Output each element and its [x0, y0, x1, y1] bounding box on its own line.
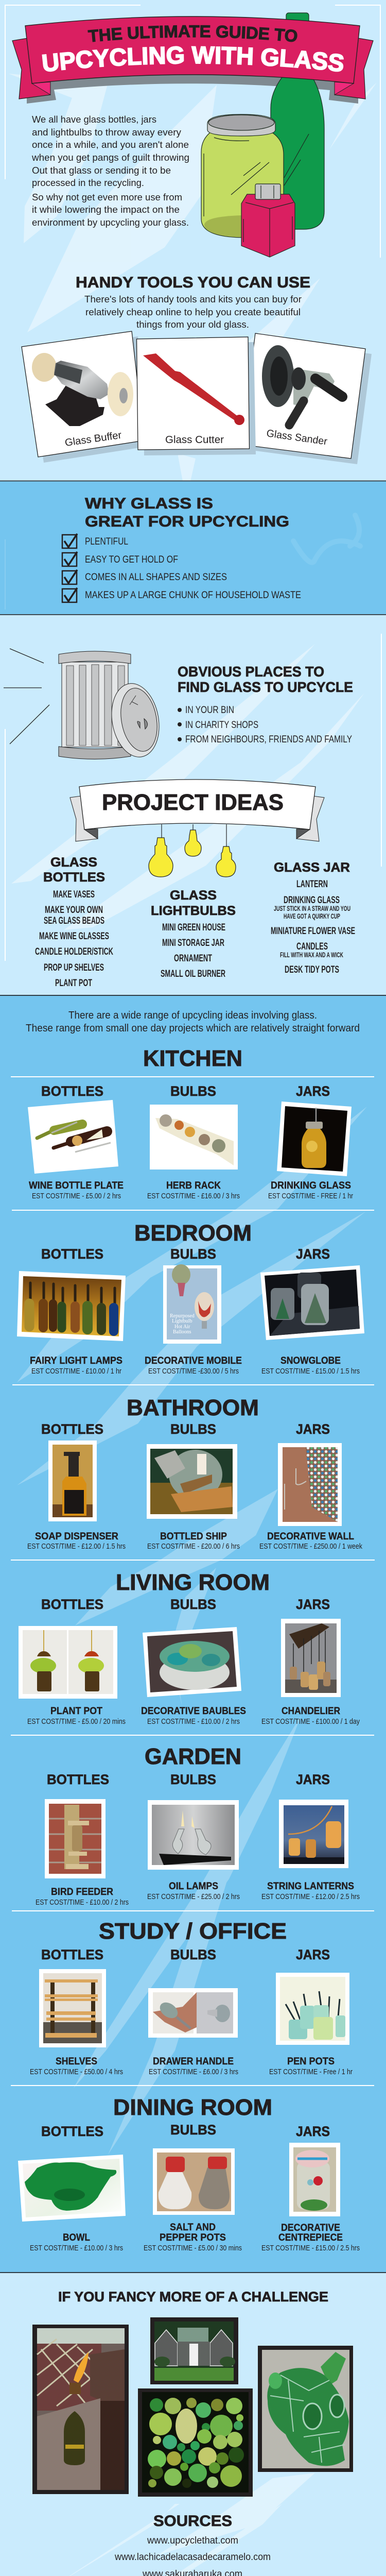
- project: decorative mobile: Hot Air: [174, 1324, 190, 1330]
- project: drawer handle: EST COST/TIME - £6.00 / 3 hrs: [149, 2067, 238, 2076]
- intro text: Out that glass or sending it to be: [32, 165, 171, 176]
- icon: checkbox 3: [62, 570, 77, 584]
- project: bottled ship: BOTTLED SHIP: [160, 1531, 227, 1542]
- intro text: [31, 114, 189, 228]
- intro text: and lightbulbs to throw away every: [32, 127, 181, 138]
- column: glass bottles: PROP UP SHELVES: [44, 962, 104, 973]
- project: decorative mobile: DECORATIVE MOBILE: [145, 1355, 242, 1366]
- column headings: BULBS: [170, 1772, 216, 1787]
- column: glass bottles: PLANT POT: [55, 978, 92, 989]
- project: drinking glass: EST COST/TIME - FREE / 1 hr: [268, 1192, 353, 1200]
- banner: project ideas: [70, 779, 324, 841]
- project: decorative mobile: EST COST/TIME -£30.00 / 5 hrs: [148, 1367, 239, 1376]
- top frame lines: [5, 5, 381, 961]
- column headings: [41, 1246, 330, 1262]
- item 3: COMES IN ALL SHAPES AND SIZES: [85, 572, 227, 583]
- panel: bedroom: [12, 1221, 374, 1385]
- icon: sander: [262, 345, 342, 425]
- heading: sources: SOURCES: [153, 2513, 232, 2530]
- heading: dining room: DINING ROOM: [113, 2095, 272, 2120]
- panel: project band background: [0, 995, 386, 2273]
- background light streaks, upper section: [9, 74, 377, 930]
- column headings: BOTTLES: [41, 2124, 103, 2139]
- icon: hanging lightbulbs: [149, 824, 236, 877]
- project: plant pot: [19, 1626, 126, 1726]
- project: string lanterns: EST COST/TIME - £12.00 / 2.5 hrs: [261, 1892, 360, 1901]
- item 2: EASY TO GET HOLD OF: [85, 554, 178, 565]
- intro text: We all have glass bottles, jars: [32, 114, 156, 125]
- project: decorative baubles: EST COST/TIME - £10.00 / 2 hrs: [147, 1717, 240, 1726]
- project: herb rack: HERB RACK: [166, 1180, 221, 1191]
- column: glass bottles: GLASS: [50, 855, 97, 870]
- source links: [114, 2535, 271, 2576]
- intro to rooms: There are a wide range of upcycling ideas involving glass.: [68, 1010, 317, 1021]
- banner shadow: [27, 62, 358, 104]
- panel: study office: [11, 1919, 374, 2086]
- column headings: JARS: [296, 1597, 330, 1612]
- column: glass jar: HAVE GOT A QUIRKY CUP: [284, 912, 340, 920]
- project: bottled ship: [147, 1444, 240, 1551]
- column headings: JARS: [296, 2124, 330, 2139]
- project: plant pot: EST COST/TIME - £5.00 / 20 mins: [27, 1717, 126, 1726]
- panel: introduction: [12, 12, 374, 258]
- panel: why glass: [0, 481, 386, 615]
- project: herb rack: EST COST/TIME - £16.00 / 3 hrs: [147, 1192, 240, 1200]
- project: snowglobe: EST COST/TIME - £15.00 / 1.5 hrs: [261, 1367, 360, 1376]
- column headings: [47, 1772, 330, 1787]
- panel: sources: [114, 2513, 271, 2576]
- project: bottled ship: EST COST/TIME - £20.00 / 6 hrs: [147, 1542, 240, 1551]
- intro text: processed in the recycling.: [32, 178, 144, 188]
- background light streaks, lower section: [42, 2473, 315, 2576]
- intro text: it while lowering the impact on the: [32, 205, 180, 215]
- project: decorative mobile: Balloons: [173, 1329, 191, 1335]
- icon: buffer: [32, 353, 133, 426]
- project: fairy light lamps: FAIRY LIGHT LAMPS: [30, 1355, 122, 1366]
- column: glass lightbulbs: LIGHTBULBS: [151, 904, 236, 918]
- project: chandelier: CHANDELIER: [282, 1706, 340, 1717]
- project: soap dispenser: EST COST/TIME - £12.00 / 1.5 hrs: [27, 1542, 126, 1551]
- heading: challenge: IF YOU FANCY MORE OF A CHALLENGE: [58, 2289, 328, 2304]
- project: oil lamps: EST COST/TIME - £25.00 / 2 hrs: [147, 1892, 240, 1901]
- icon: checkbox 4: [62, 588, 77, 602]
- intro text: So why not get even more use from: [32, 192, 182, 202]
- photo: bottle house: [150, 2317, 238, 2384]
- heading: kitchen: KITCHEN: [143, 1046, 242, 1071]
- project: shelves: EST COST/TIME - £50.00 / 4 hrs: [30, 2067, 123, 2076]
- heading: why glass: WHY GLASS IS: [85, 495, 213, 512]
- tools description: relatively cheap online to help you create beautiful: [85, 307, 301, 317]
- item 4: MAKES UP A LARGE CHUNK OF HOUSEHOLD WASTE: [85, 590, 301, 601]
- tools description: There's lots of handy tools and kits you can buy for: [84, 294, 302, 304]
- project: shelves: SHELVES: [56, 2056, 97, 2067]
- column headings: BULBS: [170, 1421, 216, 1437]
- icon: cutter: [143, 353, 244, 425]
- project: salt and pepper pots: [144, 2148, 242, 2252]
- panel: living room: [11, 1570, 374, 1735]
- photo: bottle torch: [32, 2325, 129, 2494]
- column: glass bottles: MAKE WINE GLASSES: [39, 931, 109, 942]
- title line 2: UPCYCLING WITH GLASS: [42, 46, 344, 72]
- project: drawer handle: [148, 1988, 238, 2076]
- heading: living room: LIVING ROOM: [116, 1570, 270, 1595]
- column: glass lightbulbs: [151, 888, 236, 979]
- project: decorative wall: DECORATIVE WALL: [267, 1531, 354, 1542]
- title banner: [12, 16, 374, 99]
- column headings: [41, 2122, 330, 2139]
- intro text: when you get pangs of guilt throwing: [31, 152, 189, 163]
- project: bowl: BOWL: [63, 2232, 90, 2243]
- project: drinking glass: DRINKING GLASS: [271, 1180, 351, 1191]
- project: wine bottle plate: WINE BOTTLE PLATE: [29, 1180, 124, 1191]
- column: glass bottles: BOTTLES: [43, 870, 105, 885]
- project: bird feeder: BIRD FEEDER: [51, 1887, 113, 1897]
- column headings: BULBS: [170, 1246, 216, 1262]
- column: glass lightbulbs: MINI STORAGE JAR: [162, 938, 224, 948]
- column headings: BOTTLES: [41, 1421, 103, 1437]
- intro text: once in a while, and you aren't alone: [32, 140, 189, 150]
- project: bird feeder: EST COST/TIME - £10.00 / 2 hrs: [36, 1898, 129, 1907]
- project: pen pots: [269, 1973, 353, 2076]
- left ribbon tail: [12, 38, 50, 99]
- intro text: environment by upcycling your glass.: [32, 217, 189, 228]
- project: fairy light lamps: EST COST/TIME - £10.00 / 1 hr: [31, 1367, 121, 1376]
- panel: handy tools: [22, 274, 372, 464]
- project: decorative mobile: Lightbulb: [172, 1318, 192, 1324]
- bullet list: IN YOUR BIN: [185, 705, 234, 716]
- project: decorative mobile: Repurposed: [170, 1313, 195, 1319]
- heading: why glass: [85, 495, 289, 530]
- heading: garden: GARDEN: [145, 1744, 241, 1769]
- project: string lanterns: STRING LANTERNS: [267, 1881, 354, 1892]
- column headings: JARS: [296, 1772, 330, 1787]
- column headings: [41, 1947, 330, 1962]
- column headings: BULBS: [170, 1597, 216, 1612]
- tools description: [84, 294, 302, 330]
- bullet list: IN CHARITY SHOPS: [185, 720, 258, 731]
- column headings: BOTTLES: [41, 1083, 103, 1099]
- project: oil lamps: OIL LAMPS: [169, 1881, 218, 1892]
- heading: bathroom: BATHROOM: [127, 1395, 259, 1420]
- illustration: green bottle: [271, 13, 324, 229]
- heading: obvious places: OBVIOUS PLACES TO: [178, 664, 324, 680]
- checklist: [62, 534, 301, 602]
- column headings: BULBS: [170, 2122, 216, 2138]
- banner title: PROJECT IDEAS: [102, 790, 284, 815]
- column: glass bottles: CANDLE HOLDER/STICK: [35, 946, 113, 957]
- panel: garden: [12, 1744, 374, 1911]
- label: Glass Sander: [266, 428, 328, 448]
- column: glass jar: DRINKING GLASS: [284, 895, 340, 906]
- project: oil lamps: [147, 1800, 240, 1901]
- project: snowglobe: SNOWGLOBE: [280, 1355, 341, 1366]
- panel: obvious places: [4, 649, 353, 761]
- project: decorative mobile: [145, 1264, 242, 1376]
- project: decorative centrepiece: CENTREPIECE: [278, 2232, 343, 2243]
- column: glass jar: [271, 860, 355, 975]
- intro to rooms: These range from small one day projects which are relatively straight forward: [26, 1023, 360, 1034]
- source links: www.upcyclethat.com: [147, 2535, 238, 2546]
- illustration: red square bottle: [241, 184, 295, 257]
- column: glass jar: LANTERN: [296, 879, 328, 890]
- project: pen pots: PEN POTS: [287, 2056, 335, 2067]
- column headings: [41, 1083, 330, 1099]
- column: glass bottles: MAKE YOUR OWN: [45, 905, 103, 916]
- project: wine bottle plate: [28, 1100, 124, 1200]
- heading: handy tools: HANDY TOOLS YOU CAN USE: [76, 274, 310, 291]
- bullet list: [178, 705, 352, 745]
- project: plant pot: PLANT POT: [50, 1706, 102, 1717]
- project: salt and pepper pots: EST COST/TIME - £5.00 / 30 mins: [144, 2244, 242, 2252]
- heading: why glass: GREAT FOR UPCYCLING: [85, 513, 289, 530]
- icon: checkbox 1: [62, 534, 77, 548]
- photo: glass skull: [258, 2346, 353, 2472]
- column: glass lightbulbs: SMALL OIL BURNER: [161, 969, 225, 979]
- tools description: things from your old glass.: [136, 319, 249, 330]
- column headings: JARS: [296, 1421, 330, 1437]
- intro to rooms: [26, 1010, 360, 1034]
- column: glass jar: GLASS JAR: [274, 860, 350, 875]
- project: salt and pepper pots: PEPPER POTS: [160, 2232, 226, 2243]
- project: decorative centrepiece: EST COST/TIME - £15.00 / 2.5 hrs: [261, 2244, 360, 2252]
- column headings: BULBS: [170, 1947, 216, 1962]
- source links: www.lachicadelacasadecaramelo.com: [114, 2552, 271, 2563]
- column headings: [41, 1421, 330, 1437]
- card: glass sander: [241, 333, 372, 464]
- column headings: JARS: [296, 1083, 330, 1099]
- ribbon main: [25, 16, 360, 83]
- item 1: PLENTIFUL: [85, 536, 128, 547]
- column headings: JARS: [296, 1947, 330, 1962]
- panel: challenge: [32, 2289, 353, 2497]
- title line 1: THE ULTIMATE GUIDE TO: [87, 25, 297, 42]
- column: glass lightbulbs: ORNAMENT: [174, 953, 212, 964]
- column: glass bottles: SEA GLASS BEADS: [44, 916, 104, 926]
- column: glass jar: DESK TIDY POTS: [285, 964, 339, 975]
- project: fairy light lamps: [17, 1271, 126, 1376]
- column headings: BOTTLES: [41, 1246, 103, 1262]
- project: snowglobe: [260, 1265, 364, 1376]
- project: decorative wall: [259, 1443, 362, 1551]
- heading: obvious places: [178, 664, 353, 695]
- project: herb rack: [147, 1105, 240, 1200]
- column headings: JARS: [296, 1246, 330, 1262]
- panel: dining room: [18, 2095, 360, 2252]
- column: glass bottles: MAKE VASES: [53, 889, 95, 900]
- project: decorative baubles: DECORATIVE BAUBLES: [141, 1706, 246, 1717]
- project: decorative centrepiece: [261, 2143, 360, 2252]
- ribbon folds: [32, 82, 354, 95]
- column: glass jar: CANDLES: [296, 941, 328, 952]
- heading: study office: STUDY / OFFICE: [99, 1919, 287, 1944]
- project: shelves: [30, 1969, 123, 2076]
- bullet list: FROM NEIGHBOURS, FRIENDS AND FAMILY: [185, 734, 352, 745]
- column headings: BULBS: [170, 1083, 216, 1099]
- project: bird feeder: [36, 1799, 129, 1907]
- card: glass buffer: [22, 331, 149, 463]
- project: soap dispenser: [27, 1440, 126, 1551]
- project: drinking glass: [268, 1101, 353, 1200]
- column headings: BOTTLES: [41, 1597, 103, 1612]
- project: wine bottle plate: EST COST/TIME - £5.00 / 2 hrs: [32, 1192, 121, 1200]
- column headings: [41, 1597, 330, 1612]
- band background: [0, 481, 386, 615]
- icon: bin: [4, 649, 165, 761]
- label: Glass Buffer: [64, 430, 122, 449]
- heading: bedroom: BEDROOM: [134, 1221, 252, 1246]
- column: glass jar: FILL WITH WAX AND A WICK: [280, 951, 343, 959]
- column headings: BOTTLES: [41, 1947, 103, 1962]
- column: glass lightbulbs: GLASS: [170, 888, 217, 903]
- project: drawer handle: DRAWER HANDLE: [153, 2056, 234, 2067]
- project: chandelier: EST COST/TIME - £100.00 / 1 day: [261, 1717, 360, 1726]
- heading: obvious places: FIND GLASS TO UPCYCLE: [178, 679, 353, 695]
- project: bowl: EST COST/TIME - £10.00 / 3 hrs: [30, 2244, 123, 2252]
- column: glass lightbulbs: MINI GREEN HOUSE: [162, 922, 225, 933]
- panel: bathroom: [11, 1395, 375, 1560]
- icon: checkbox 2: [62, 552, 77, 566]
- column headings: BOTTLES: [47, 1772, 109, 1787]
- panel: project ideas: [35, 779, 355, 989]
- project: chandelier: [261, 1619, 360, 1726]
- panel: kitchen: [11, 1046, 374, 1210]
- column: glass bottles: [35, 855, 113, 989]
- photo: stained glass bottles: [138, 2388, 253, 2497]
- project: decorative wall: EST COST/TIME - £250.00 / 1 week: [259, 1542, 362, 1551]
- card: glass cutter: [137, 337, 256, 455]
- project: salt and pepper pots: SALT AND: [170, 2222, 216, 2233]
- illustration: lime jar: [201, 114, 284, 238]
- project: bowl: [18, 2155, 126, 2252]
- project: decorative baubles: [141, 1627, 246, 1726]
- project: decorative centrepiece: DECORATIVE: [281, 2223, 340, 2233]
- right ribbon tail: [335, 38, 373, 99]
- project: pen pots: EST COST/TIME - Free / 1 hr: [269, 2067, 353, 2076]
- label: Glass Cutter: [165, 434, 224, 446]
- project: soap dispenser: SOAP DISPENSER: [35, 1531, 118, 1542]
- project: string lanterns: [261, 1800, 360, 1901]
